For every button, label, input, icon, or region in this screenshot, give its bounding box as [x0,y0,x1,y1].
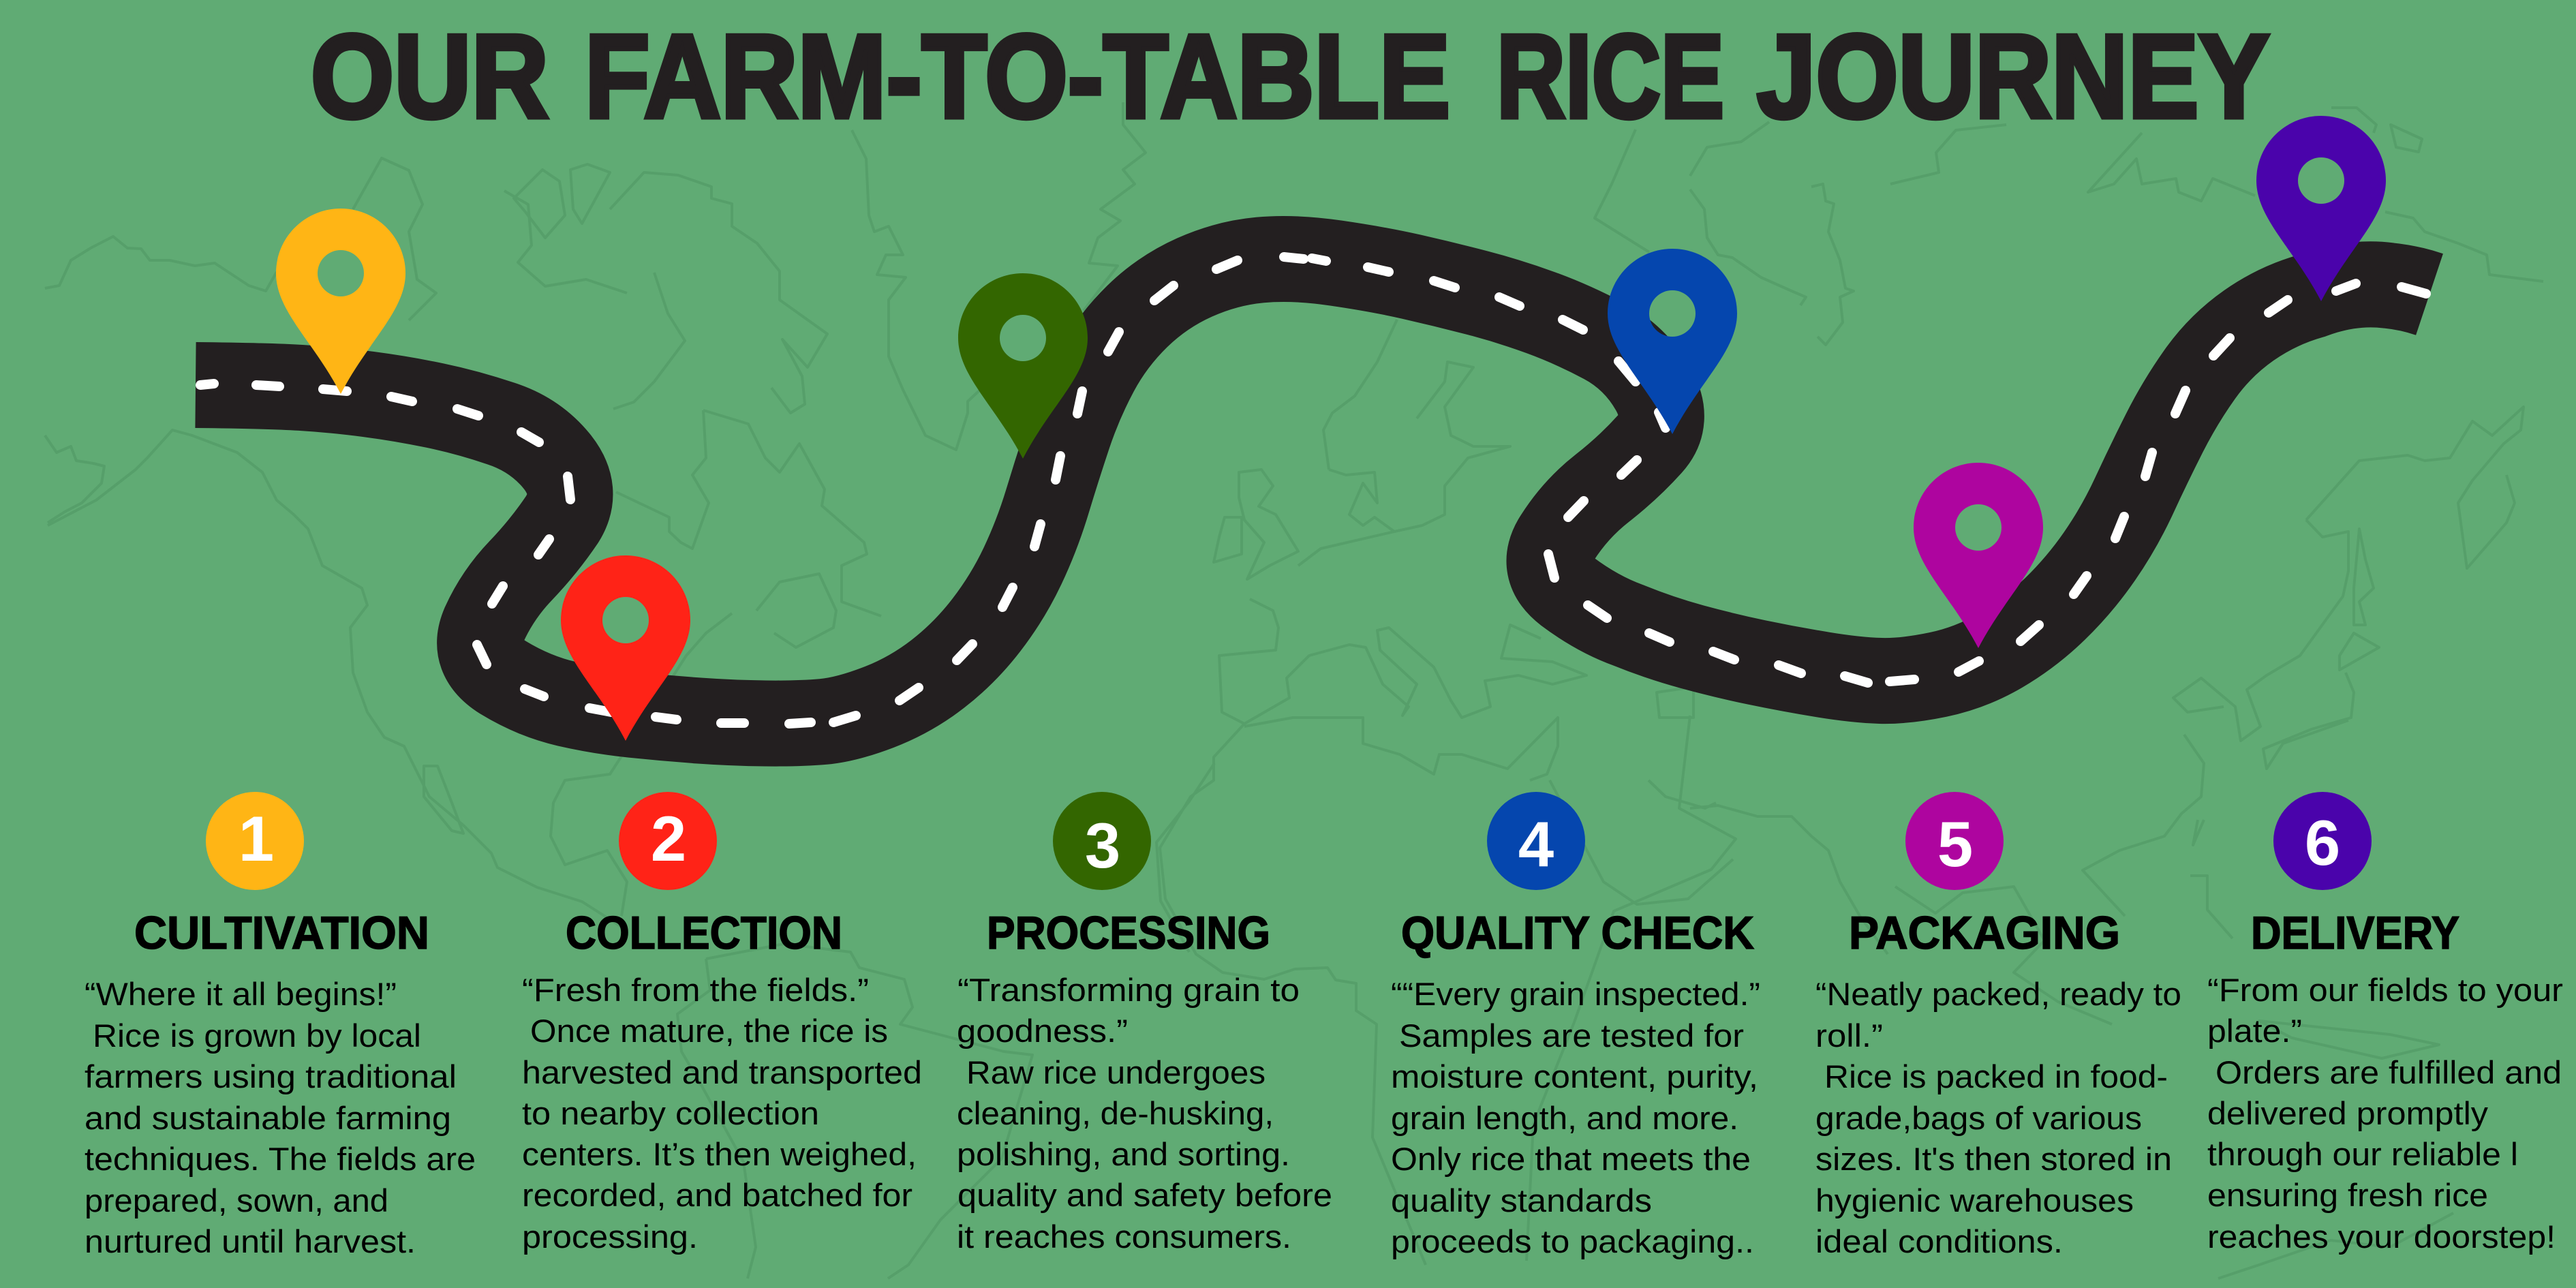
text: cultivation description: nurtured until harvest. [85,1223,416,1259]
text: packaging description: grade,bags of various [1815,1100,2142,1136]
number badge 5: 5 [1937,808,1973,880]
pin 4: blue [1608,249,1737,434]
step 3: processing [957,792,1332,1255]
text: delivery description: plate.” [2207,1013,2302,1049]
number badge 2 [619,792,717,890]
text: quality check description: grain length, and more. [1391,1100,1738,1136]
text: packaging description: roll.” [1815,1017,1883,1054]
number badge 2: 2 [651,803,686,874]
winding road [196,259,2429,724]
text: cultivation description: farmers using traditional [85,1058,457,1094]
text: processing description: “Transforming grain to [957,972,1300,1008]
step 1: cultivation [85,792,476,1259]
text: cultivation description: “Where it all begins!” [85,976,397,1012]
text: cultivation description: prepared, sown, and [85,1182,388,1218]
text: delivery description: through our reliable l [2207,1136,2518,1172]
text: delivery description: ensuring fresh rice [2207,1177,2488,1213]
step 5: packaging [1815,792,2181,1259]
heading: cultivation: CULTIVATION [134,907,429,959]
text: quality check description: quality standards [1391,1182,1652,1218]
text: processing description: Raw rice undergoes [966,1054,1266,1090]
number badge 4: 4 [1518,808,1554,880]
text: processing description [957,972,1332,1255]
heading: delivery: DELIVERY [2251,907,2459,959]
pin 6: purple [2256,116,2386,301]
text: quality check description: moisture content, purity, [1391,1058,1758,1094]
pin 5: magenta [1914,463,2043,648]
text: collection description: processing. [522,1218,698,1255]
text: delivery description: delivered promptly [2207,1095,2489,1131]
text: delivery description: Orders are fulfilled and [2215,1054,2562,1090]
number badge 1 [206,792,304,890]
text: cultivation description: Rice is grown by local [93,1017,421,1054]
number badge 1: 1 [239,803,274,874]
number badge 3: 3 [1085,810,1120,881]
text: collection description: to nearby collection [522,1095,819,1131]
title: RICE [1497,10,1724,142]
number badge 6 [2273,792,2372,890]
text: packaging description: Rice is packed in food- [1824,1058,2168,1094]
step 4: quality check [1391,792,1760,1259]
text: processing description: quality and safety before [957,1177,1332,1213]
text: cultivation description [85,976,476,1259]
road centre dashes [200,257,2426,724]
step 2: collection [522,792,922,1255]
text: quality check description: proceeds to packaging.. [1391,1223,1754,1259]
pin 1: yellow [276,209,405,394]
text: processing description: cleaning, de-husking, [957,1095,1274,1131]
heading: quality check: QUALITY CHECK [1401,907,1754,959]
pin 3: green [958,273,1088,459]
text: processing description: it reaches consumers. [957,1218,1291,1255]
heading: processing: PROCESSING [987,907,1270,959]
text: quality check description: Only rice that meets the [1391,1141,1751,1177]
text: delivery description: “From our fields to your [2207,972,2563,1008]
text: cultivation description: and sustainable farming [85,1100,451,1136]
heading: packaging: PACKAGING [1849,907,2120,959]
heading: collection: COLLECTION [566,907,842,959]
text: collection description: “Fresh from the fields.” [522,972,869,1008]
text: collection description: recorded, and batched for [522,1177,913,1213]
text: quality check description: ““Every grain inspected.” [1391,976,1760,1012]
step 6: delivery [2207,792,2563,1255]
text: collection description: harvested and transported [522,1054,922,1090]
title: FARM-TO-TABLE [585,10,1450,142]
title [311,10,2269,142]
number badge 4 [1487,792,1585,890]
text: quality check description [1391,976,1760,1259]
text: collection description [522,972,922,1255]
title: JOURNEY [1757,10,2269,142]
text: packaging description: sizes. It's then stored in [1815,1141,2172,1177]
text: packaging description: hygienic warehouses [1815,1182,2134,1218]
text: delivery description: reaches your doorstep! [2207,1218,2556,1255]
number badge 6: 6 [2305,807,2340,878]
text: quality check description: Samples are tested for [1399,1017,1744,1054]
text: processing description: goodness.” [957,1013,1128,1049]
text: collection description: centers. It’s then weighed, [522,1136,917,1172]
number badge 5 [1905,792,2004,890]
pin 2: red [561,555,690,741]
text: packaging description: ideal conditions. [1815,1223,2063,1259]
text: delivery description [2207,972,2563,1255]
text: cultivation description: techniques. The fields are [85,1141,476,1177]
text: collection description: Once mature, the rice is [530,1013,888,1049]
text: packaging description [1815,976,2181,1259]
title: OUR [311,10,549,142]
text: packaging description: “Neatly packed, ready to [1815,976,2181,1012]
number badge 3 [1053,792,1151,890]
text: processing description: polishing, and sorting. [957,1136,1290,1172]
